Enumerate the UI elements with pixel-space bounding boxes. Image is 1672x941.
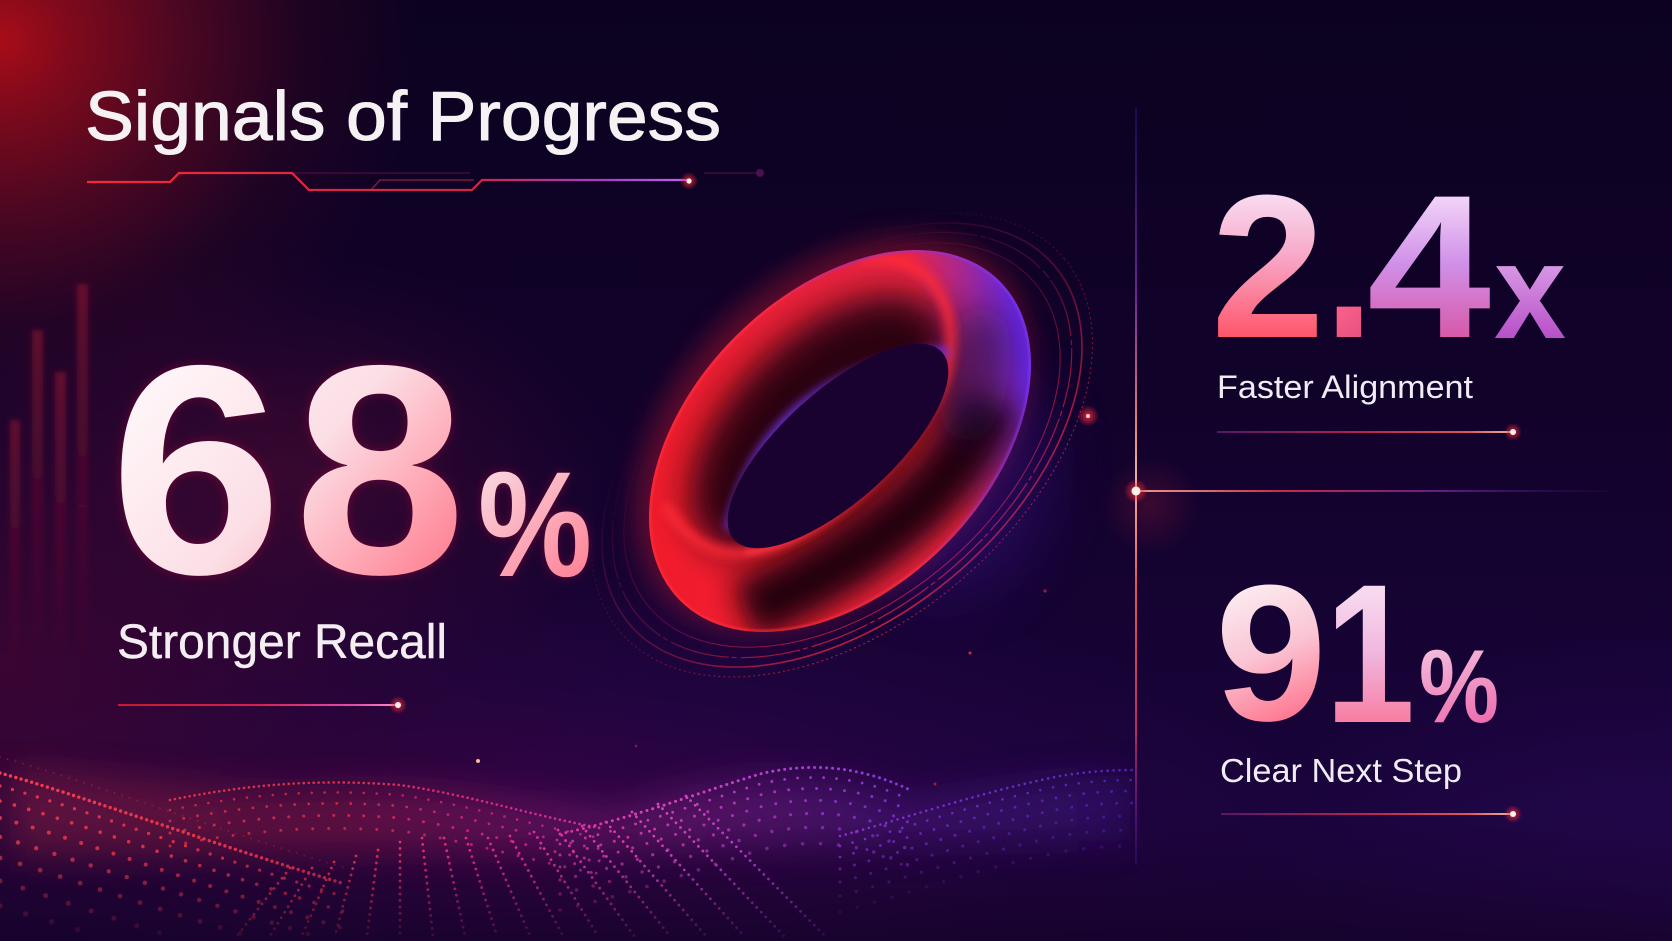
converging vertical dot streams [237,796,825,936]
value 68% [110,304,592,637]
value 2.4x: x [1494,215,1566,367]
wave haze [10,770,1130,860]
value 68%: 8 [294,304,466,637]
value 91%: 1 [1325,543,1415,764]
title: Signals of Progress [85,77,721,155]
torus glow [559,161,1105,707]
value 91%: 9 [1215,545,1327,762]
value 68%: 6 [110,304,282,637]
orbit spark [1077,405,1099,427]
value 2.4x: . [1325,153,1373,381]
accent line [1221,805,1522,823]
accent line [1217,423,1522,441]
torus hole [697,311,979,581]
label: Clear Next Step [1220,752,1462,789]
stat: 91% Clear Next Step [1215,543,1522,823]
left slope rows [0,757,345,936]
small particles [635,589,1047,786]
ridge spark [476,759,480,763]
value 68%: % [478,440,592,608]
orbit rings [504,121,1180,769]
right purple lobes [560,767,1134,912]
middle ridge rows [170,782,600,874]
value 2.4x: 4 [1367,153,1491,381]
decorative faint data bars at left edge [10,284,88,664]
title circuit underline [87,169,764,190]
dotted particle wave terrain [0,757,1134,936]
label: Stronger Recall [117,616,447,669]
accent line [118,696,407,714]
value 91% [1215,543,1499,764]
right panel divider lines [1100,108,1610,865]
central glowing torus ring [591,212,1098,786]
stat: 68% Stronger Recall [110,304,592,714]
torus body [648,250,1031,632]
value 2.4x: 2 [1211,153,1325,381]
label: Faster Alignment [1217,369,1473,405]
stat: 2.4x Faster Alignment [1211,153,1566,441]
value 2.4x [1211,153,1566,381]
value 91%: % [1419,629,1499,745]
